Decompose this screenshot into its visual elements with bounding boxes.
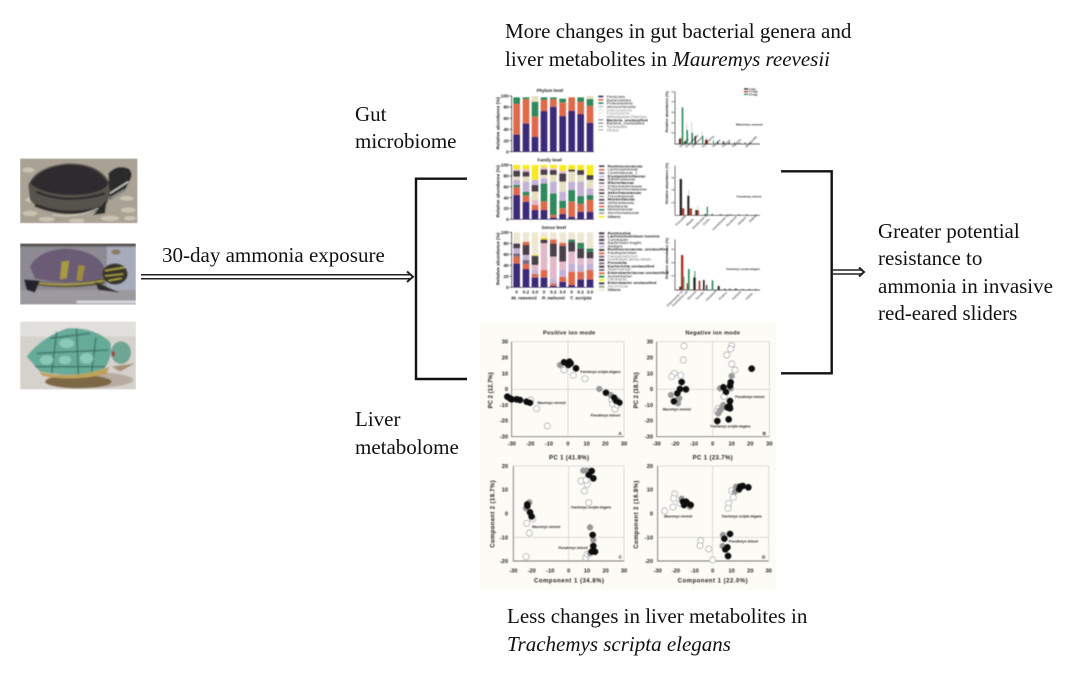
caption: PC 1 right: PC 1 (23.7%) — [693, 455, 733, 461]
legend: family: Neisseriaceae — [608, 207, 634, 212]
legend: family: Moraxellaceae — [608, 197, 636, 202]
chart: genus level: 80 — [503, 241, 509, 246]
chart: Mauremys reevesii genera: 1.2 — [671, 102, 675, 104]
plot: component analysis positive: 20 — [502, 464, 508, 470]
chart: genus level — [495, 225, 669, 302]
plot: PCA negative: -20 — [645, 419, 653, 425]
heading: top: liver metabolites in Mauremys reevesii — [505, 47, 830, 71]
chart: phylum level: 80 — [503, 105, 509, 110]
x-axis labels: doses and species: 3.0 — [587, 289, 594, 294]
legend: genus: Escherichia unclassified — [608, 263, 655, 268]
chart: Pseudemys nelsoni genera: Alistipes — [737, 215, 748, 226]
legend: family: Erysipelotrichaceae — [608, 173, 646, 178]
chart: family level: 20 — [503, 206, 509, 211]
plot: PCA negative: 20 — [747, 441, 753, 447]
chart: phylum level: 60 — [503, 116, 509, 121]
chart: genus level: 40 — [503, 263, 509, 268]
legend: family — [599, 163, 648, 219]
chart: Pseudemys nelsoni genera: Pseudemys nelsoni — [737, 194, 762, 198]
plot: component analysis positive: -10 — [500, 535, 508, 541]
caption: PC 1 left: PC 1 (41.9%) — [549, 455, 589, 461]
legend: family: Porphyromonadaceae — [608, 187, 648, 192]
plot: component analysis positive: 30 — [621, 568, 627, 574]
chart: family level: 60 — [503, 184, 509, 189]
plot: PCA negative: Mauremys reevesii — [663, 408, 691, 412]
plot: PCA negative: 30 — [766, 441, 772, 447]
plot: PCA negative: -20 — [671, 441, 679, 447]
heading: negative ion mode: Negative ion mode — [685, 330, 740, 336]
chart: Trachemys scripta elegans genera: Escherichia coli — [671, 290, 689, 307]
legend: dose: 0 mg/L — [749, 89, 757, 91]
plot: PCA positive: PC 2 (12.7%) — [489, 372, 495, 408]
legend: family: Others — [608, 214, 621, 219]
plot: PCA negative: Trachemys scripta elegans — [710, 425, 751, 429]
chart: Mauremys reevesii genera: 0.9 — [671, 112, 675, 114]
chart: Mauremys reevesii genera: Escherichia — [701, 134, 715, 148]
legend: phylum: Firmicutes — [607, 94, 625, 99]
chart: Pseudemys nelsoni genera: 0.6 — [671, 178, 675, 180]
plot: component analysis negative: Component 1 (22.0%) — [678, 578, 748, 584]
chart: family level: Family level — [537, 158, 562, 163]
plot: component analysis positive: 0 — [505, 512, 508, 518]
label: liver metabolome: Liver — [355, 407, 400, 431]
legend: family: Veillonellaceae — [608, 200, 635, 205]
chart: Trachemys scripta elegans genera: Kluyvera — [686, 289, 697, 301]
photo: Mauremys reevesii — [20, 158, 138, 223]
plot: component analysis positive: -20 — [500, 559, 508, 565]
chart: phylum level: 40 — [503, 127, 509, 132]
plot: component analysis negative: -20 — [645, 559, 653, 565]
photo: Trachemys scripta elegans — [20, 321, 136, 390]
x-axis labels: doses and species: 0 — [570, 289, 573, 294]
turtle photographs — [20, 158, 138, 390]
chart: Pseudemys nelsoni genera: Blautia — [685, 217, 695, 227]
chart: phylum level: Phylum level — [537, 88, 563, 93]
legend: dose: 0.2 mg/L — [749, 92, 759, 94]
chart: Pseudemys nelsoni genera: 0.4 — [671, 189, 675, 192]
chart: Trachemys scripta elegans genera: Citrobacter — [705, 289, 718, 302]
legend: family: Enterobacteriaceae — [608, 183, 643, 188]
plot: PCA positive: 30 — [621, 441, 627, 447]
chart: genus level: 60 — [503, 252, 509, 257]
plot: component analysis negative: 10 — [647, 488, 653, 494]
plot: component analysis positive: 20 — [603, 568, 609, 574]
x-axis labels: doses and species: P. nelsoni — [542, 296, 565, 302]
plot: component analysis negative: -30 — [654, 568, 662, 574]
plot: component analysis positive: C — [619, 554, 623, 559]
legend: genus: Turicibacter — [608, 237, 629, 242]
plot: component analysis negative: 10 — [729, 568, 735, 574]
plot: PCA positive: -20 — [526, 441, 534, 447]
chart: Pseudemys nelsoni genera: Acinetobacter sp. — [711, 212, 730, 231]
legend: phylum: Fusobacteria — [607, 111, 630, 116]
plot: PCA positive: -10 — [545, 441, 553, 447]
plot: component analysis positive: Component 2 (19.7%) — [491, 480, 497, 548]
legend: phylum: Actinobacteria — [607, 107, 633, 112]
legend: genus: Enterobacter unclassified — [608, 280, 657, 285]
plot: component analysis positive: -30 — [509, 568, 517, 574]
chart: family level: 80 — [503, 174, 509, 179]
plot: PCA positive: 0 — [505, 387, 508, 393]
legend: genus: Bacteroides fragilis — [608, 240, 641, 245]
chart: Trachemys scripta elegans genera: Pantoea — [731, 290, 742, 301]
x-axis labels: doses and species: 0.2 — [577, 289, 584, 294]
chart: Trachemys scripta elegans genera — [665, 237, 760, 307]
x-axis labels: doses and species: T. scripta — [570, 296, 592, 302]
plot: component analysis negative: -10 — [645, 535, 653, 541]
legend: phylum: Verrucomicrobia — [607, 104, 636, 109]
x-axis labels: doses and species: 0 — [515, 289, 518, 294]
chart: Mauremys reevesii genera: Relative abundance (%) — [665, 91, 669, 132]
chart: Pseudemys nelsoni genera: Romboutsia sp. — [691, 212, 709, 230]
plot: PCA negative: -30 — [653, 441, 661, 447]
chart: Pseudemys nelsoni genera — [665, 162, 762, 231]
legend: dose — [744, 88, 759, 96]
chart: Pseudemys nelsoni genera: Dorea — [702, 217, 711, 226]
x-axis labels: doses and species: 3.0 — [559, 289, 566, 294]
plot: PCA negative: 0 — [650, 387, 653, 393]
plot: PCA positive: Mauremys reevesii — [537, 401, 566, 405]
chart: Trachemys scripta elegans genera: Relative abundance (%) — [665, 237, 669, 279]
chart: Mauremys reevesii genera: 0.6 — [671, 122, 675, 124]
chart: Mauremys reevesii genera: Mauremys reevesii — [736, 122, 763, 126]
plot: PCA positive: 20 — [602, 441, 608, 447]
chart: family level — [495, 158, 648, 222]
chart: genus level: Relative abundance (%) — [495, 232, 500, 285]
chart: genus level: Genus level — [542, 225, 566, 230]
plot: PCA negative: Pseudemys nelsoni — [735, 395, 765, 399]
chart: Mauremys reevesii genera: 1.5 — [671, 91, 675, 93]
chart: Trachemys scripta elegans genera: 0.2 — [671, 276, 675, 278]
legend: dose: 3.0 mg/L — [749, 94, 759, 96]
plot: component analysis negative: Trachemys scripta elegans — [721, 514, 762, 518]
conclusion text: ammonia in invasive — [878, 274, 1053, 298]
bracket: right — [781, 171, 832, 373]
heading: bottom: Trachemys scripta elegans — [507, 632, 731, 656]
label: liver metabolome: metabolome — [355, 435, 459, 459]
plot: component analysis positive: Pseudemys nelsoni — [558, 546, 588, 550]
chart: Pseudemys nelsoni genera: Dialister — [748, 213, 758, 223]
chart: family level: 0 — [506, 217, 509, 222]
plot: component analysis positive: 10 — [502, 488, 508, 494]
arrow: result double arrow — [833, 268, 864, 276]
plot: PCA positive: 10 — [584, 441, 590, 447]
plot: PCA positive: 0 — [566, 441, 570, 447]
chart: phylum level: 100 — [501, 94, 509, 99]
plot: component analysis positive: Component 1 (34.8%) — [534, 578, 604, 584]
plot: component analysis negative: 30 — [766, 568, 772, 574]
plot: PCA positive: 30 — [502, 340, 508, 346]
chart: phylum level: 20 — [503, 138, 509, 143]
chart: Trachemys scripta elegans genera: 0.4 — [671, 261, 675, 264]
x-axis labels: doses and species: 0.2 — [550, 289, 557, 294]
plot: PCA positive — [489, 340, 627, 447]
legend: genus: Parabacteroides — [608, 250, 637, 255]
plot: PCA positive: -30 — [500, 435, 508, 441]
legend: family: Akkermansiaceae — [608, 190, 642, 195]
label: gut microbiome: Gut — [355, 102, 386, 126]
panel: component score plots — [491, 455, 772, 584]
legend: phylum: Others — [607, 127, 619, 132]
chart: Trachemys scripta elegans genera: Enterobacter sp. — [666, 289, 684, 307]
legend: genus: Faecalibacterium — [608, 253, 639, 258]
chart: Trachemys scripta elegans genera: Trachemys scripta elegans — [726, 267, 760, 271]
legend: genus: Citrobacter — [608, 277, 628, 282]
chart: Pseudemys nelsoni genera: Prevotella — [675, 214, 687, 227]
plot: component analysis positive: Trachemys scripta elegans — [571, 506, 611, 510]
x-axis labels: doses and species: 0 — [543, 289, 546, 294]
chart: family level: Relative abundance (%) — [495, 165, 500, 217]
bracket: left — [416, 179, 467, 379]
heading: top: More changes in gut bacterial genera and — [505, 19, 851, 43]
plot: component analysis negative: D — [762, 554, 766, 559]
plot: component analysis negative: 20 — [747, 568, 753, 574]
chart: Trachemys scripta elegans genera: Hafnia — [745, 292, 754, 301]
legend: phylum: Bacteria_unclassified — [607, 121, 644, 126]
conclusion text: resistance to — [878, 246, 982, 270]
panel: stacked bar charts — [495, 88, 669, 302]
plot: PCA negative: -30 — [645, 435, 653, 441]
legend: genus: Romboutsia — [608, 230, 631, 235]
plot: PCA positive: -30 — [508, 441, 516, 447]
plot: PCA negative: 10 — [729, 441, 735, 447]
legend: genus: Aeromonas — [608, 283, 628, 288]
plot: PCA positive: -20 — [500, 419, 508, 425]
legend: genus: Akkermansia — [608, 267, 631, 272]
legend: genus: Clostridium sensu stricto — [608, 257, 652, 262]
legend: genus: Others — [608, 287, 621, 292]
legend: family: Bacteroidaceae — [608, 177, 636, 182]
legend: genus: Acinetobacter — [608, 273, 633, 278]
plot: component analysis negative: Pseudemys nelsoni — [729, 540, 758, 544]
plot: PCA negative: B — [763, 431, 767, 436]
plot: PCA positive: Trachemys scripta elegans — [580, 370, 621, 374]
legend: family: Ruminococcaceae — [608, 163, 643, 168]
legend: family: Rikenellaceae — [608, 180, 635, 185]
plot: PCA negative: 30 — [647, 340, 653, 346]
legend: phylum — [598, 94, 648, 132]
x-axis labels: doses and species: 0.2 — [523, 289, 530, 294]
chart: genus level: 20 — [503, 274, 509, 279]
plot: component analysis negative: Mauremys reevesii — [664, 515, 692, 519]
plot: PCA positive: 20 — [502, 356, 508, 362]
legend: phylum: Tenericutes — [607, 124, 627, 129]
legend: family: Prevotellaceae — [608, 193, 635, 198]
plot: component analysis positive: 10 — [584, 568, 590, 574]
chart: Mauremys reevesii genera: Kluyvera — [679, 137, 690, 148]
plot: PCA positive: Pseudemys nelsoni — [591, 413, 620, 417]
panel: PCA and PLS-DA score plots background — [480, 322, 776, 590]
chart: Mauremys reevesii genera: Pantoea — [731, 137, 742, 148]
plot: component analysis negative — [634, 464, 772, 584]
chart: Trachemys scripta elegans genera: Serratia — [695, 290, 705, 301]
legend: family: Clostridiaceae_1 — [608, 170, 638, 175]
plot: component analysis negative: -20 — [672, 568, 680, 574]
legend: family: Bacillaceae — [608, 203, 629, 208]
chart: Mauremys reevesii genera: Morganella — [745, 135, 758, 148]
plot: component analysis positive — [491, 464, 627, 584]
chart: phylum level — [495, 88, 648, 154]
chart: Trachemys scripta elegans genera: Proteus — [718, 290, 728, 301]
chart: genus level: 100 — [501, 230, 509, 235]
chart: Mauremys reevesii genera — [665, 91, 763, 148]
chart: Mauremys reevesii genera: Serratia — [711, 138, 722, 148]
chart: Pseudemys nelsoni genera: 0.2 — [671, 202, 675, 204]
conclusion text: red-eared sliders — [878, 301, 1017, 325]
legend: genus: Prevotella — [608, 260, 627, 265]
plot: PCA positive: 10 — [502, 371, 508, 377]
plot: component analysis positive: -20 — [528, 568, 536, 574]
plot: PCA positive: -10 — [500, 403, 508, 409]
plot: component analysis negative: -10 — [691, 568, 699, 574]
label: 30-day ammonia exposure: 30-day ammonia exposure — [162, 243, 385, 267]
chart: Mauremys reevesii genera: 0.3 — [671, 133, 675, 135]
photo: Pseudemys nelsoni — [20, 243, 136, 305]
arrow: exposure double arrow — [141, 272, 413, 282]
plot: PCA negative: -10 — [690, 441, 698, 447]
plot: component analysis negative: 20 — [647, 464, 653, 470]
chart: family level: 100 — [501, 163, 509, 168]
legend: phylum: Bacteria_unclassified — [607, 117, 648, 122]
plot: PCA negative: 20 — [647, 356, 653, 362]
panel: positive and negative PCA plots — [489, 330, 772, 447]
plot: PCA negative: 10 — [647, 371, 653, 377]
legend: family: Lachnospiraceae — [608, 167, 639, 172]
heading: bottom: Less changes in liver metabolites in — [507, 604, 807, 628]
plot: PCA negative: 0 — [711, 441, 714, 447]
x-axis labels: doses and species: M. reevesii — [511, 296, 537, 302]
legend: phylum: Bacteroidetes — [607, 97, 631, 102]
panel: differential abundance bar charts — [665, 88, 763, 307]
plot: component analysis negative: 0 — [650, 512, 653, 518]
chart: Trachemys scripta elegans genera: 0.6 — [671, 249, 675, 251]
legend: genus: Enterobacteriaceae unclassified — [608, 270, 669, 275]
chart: phylum level: Relative abundance (%) — [495, 97, 500, 149]
legend: genus: Ruminococcaceae_unclassified — [608, 247, 668, 252]
chart: family level: 40 — [503, 195, 509, 200]
plot: PCA positive: A — [618, 431, 622, 436]
chart: Pseudemys nelsoni genera: Relative abundance (%) — [665, 162, 669, 204]
label: gut microbiome: microbiome — [355, 129, 456, 153]
legend: genus: Alistipes — [608, 243, 623, 248]
plot: PCA negative: PC 2 (18.7%) — [634, 372, 640, 408]
legend: genus — [599, 230, 669, 292]
plot: component analysis negative: 0 — [711, 568, 714, 574]
legend: phylum: Deinococcus-Thermus — [607, 114, 647, 119]
chart: Mauremys reevesii genera: Enterobacter — [685, 133, 699, 148]
plot: PCA negative — [634, 340, 772, 447]
chart: phylum level: 0 — [506, 149, 509, 154]
x-axis labels: doses and species — [511, 289, 594, 302]
plot: PCA negative: -10 — [645, 403, 653, 409]
plot: component analysis negative: Component 2 (16.8%) — [634, 481, 640, 549]
legend: family: Aeromonadaceae — [608, 210, 640, 215]
chart: genus level: 0 — [506, 285, 509, 290]
chart: Mauremys reevesii genera: Proteus — [721, 138, 732, 148]
heading: positive ion mode: Positive ion mode — [543, 330, 595, 336]
legend: phylum: Proteobacteria — [607, 101, 633, 106]
plot: component analysis positive: Mauremys reevesii — [532, 525, 560, 529]
chart: Pseudemys nelsoni genera: Roseburia — [725, 215, 738, 227]
plot: component analysis positive: 0 — [567, 568, 570, 574]
legend: genus: Lachnoclostridium hominis — [608, 233, 660, 238]
conclusion text: Greater potential — [878, 219, 1020, 243]
plot: component analysis positive: -10 — [546, 568, 554, 574]
chart: Mauremys reevesii genera: Citrobacter — [691, 135, 704, 148]
x-axis labels: doses and species: 3.0 — [532, 289, 539, 294]
